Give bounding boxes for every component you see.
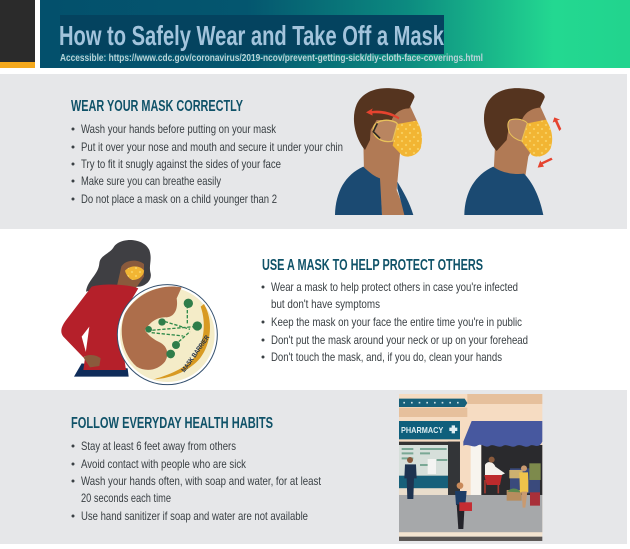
header banner — [40, 0, 630, 68]
bullet list — [72, 439, 322, 523]
heading: USE A MASK TO HELP PROTECT OTHERS — [262, 257, 483, 274]
bullet list: Don't put the mask around your neck or up on your forehead — [271, 333, 528, 347]
bullet list: Avoid contact with people who are sick — [81, 457, 247, 471]
heading: FOLLOW EVERYDAY HEALTH HABITS — [71, 415, 273, 432]
heading: WEAR YOUR MASK CORRECTLY — [71, 98, 243, 115]
bullet list: Wash your hands before putting on your mask — [81, 122, 277, 136]
bullet list: Use hand sanitizer if soap and water are not available — [81, 509, 308, 523]
bullet list: Try to fit it snugly against the sides of your face — [81, 157, 281, 171]
illustration: man fitting mask behind ear — [335, 88, 422, 215]
bullet list: but don't have symptoms — [271, 297, 380, 311]
left accent block — [0, 0, 35, 68]
panel: follow everyday health habits — [0, 390, 627, 544]
sign text: PHARMACY — [401, 425, 444, 435]
bullet list: Put it over your nose and mouth and secure it under your chin — [81, 140, 343, 154]
bullet list: 20 seconds each time — [81, 491, 171, 505]
panel: wear your mask correctly — [0, 74, 627, 229]
illustration: pharmacy storefront street scene — [399, 394, 542, 541]
bullet list: Make sure you can breathe easily — [81, 174, 221, 188]
illustration: man with fitted mask and arrows — [464, 88, 561, 215]
bullet list — [262, 280, 528, 364]
bullet list: Stay at least 6 feet away from others — [81, 439, 236, 453]
bullet list: Don't touch the mask, and, if you do, clean your hands — [271, 350, 502, 364]
bullet list: Keep the mask on your face the entire time you're in public — [271, 315, 522, 329]
bullet list: Do not place a mask on a child younger than 2 — [81, 192, 277, 206]
title: How to Safely Wear and Take Off a Mask — [59, 20, 444, 51]
bullet list — [72, 122, 343, 206]
bullet list: Wear a mask to help protect others in case you're infected — [271, 280, 518, 294]
label: mask barrier: MASK BARRIER — [181, 334, 211, 374]
panel: use a mask to help protect others — [61, 240, 528, 385]
bullet list: Wash your hands often, with soap and water, for at least — [81, 474, 322, 488]
illustration: woman with mask and mask barrier close-up — [61, 240, 217, 385]
source url: Accessible: https://www.cdc.gov/coronavirus/2019-ncov/prevent-getting-sick/diy-cloth-face-coverings.html — [60, 53, 483, 64]
